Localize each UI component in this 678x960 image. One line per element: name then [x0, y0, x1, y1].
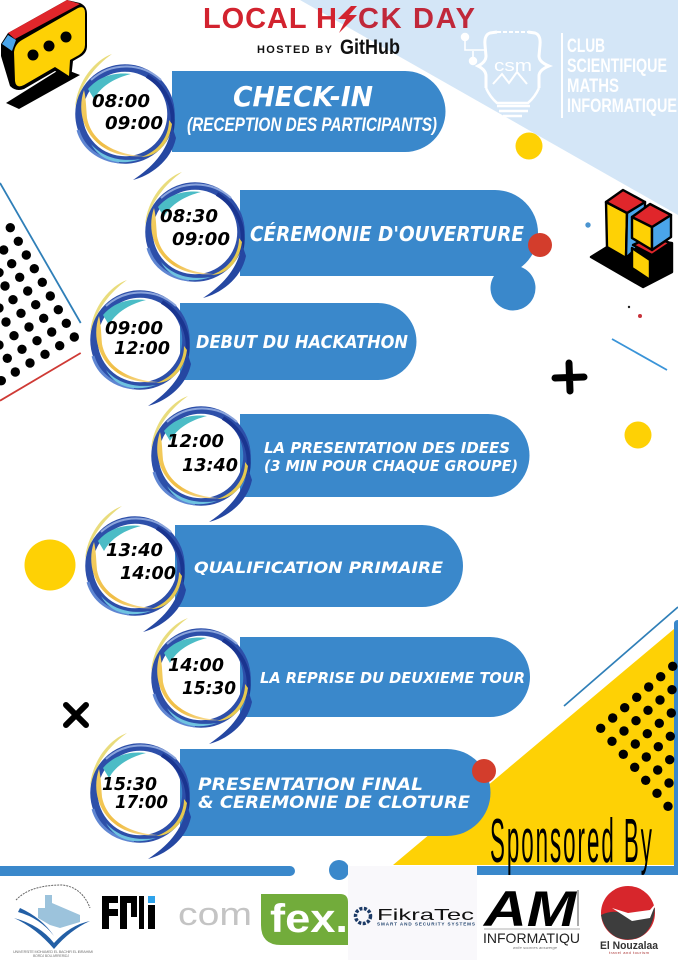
icon: plus [555, 363, 584, 391]
hosted by github [257, 36, 400, 59]
clock ring [90, 733, 191, 859]
times: 08:30 [160, 206, 218, 227]
times: 12:00 [114, 338, 170, 359]
clock ring [85, 506, 186, 632]
clock ring [151, 396, 252, 522]
logo: AM informatique [482, 881, 580, 950]
times [167, 431, 238, 476]
background: light blue corner [300, 0, 678, 215]
times: 15:30 [102, 774, 157, 795]
sponsored by heading: Sponsored By [490, 806, 652, 875]
dot pattern: left [0, 223, 79, 385]
background: yellow triangle [393, 629, 674, 865]
label: LA REPRISE DU DEUXIEME TOUR [260, 669, 525, 687]
logo: El Nouzalaa: travel and tourism [609, 950, 650, 955]
decorative line top of triangle [564, 607, 678, 706]
logo: El Nouzalaa: El Nouzalaa [600, 940, 659, 952]
label [264, 439, 518, 475]
logo: comfex: fex. [270, 897, 348, 941]
times: 13:40 [182, 455, 238, 476]
label: LA PRESENTATION DES IDEES [264, 439, 510, 457]
logo: fikratec: SMART AND SECURITY SYSTEMS [377, 922, 475, 926]
logo: comfex [178, 894, 348, 945]
schedule item 6 [151, 618, 530, 744]
label: PRESENTATION FINAL [198, 775, 423, 795]
logo: fikratec: FikraTec [377, 907, 474, 924]
clock ring [145, 172, 246, 298]
yellow dot right [624, 422, 652, 448]
times: 12:00 [167, 431, 224, 452]
logo: university: UNIVERSITE MOHAMED EL BACHIR EL IBRAHIMI [13, 950, 93, 954]
logo: AM informatique: write sources answerge [513, 945, 558, 950]
times [106, 540, 176, 584]
dot pattern: right [596, 662, 677, 811]
bar [240, 637, 530, 717]
logo: AM informatique: INFORMATIQU [483, 930, 580, 946]
left red line [0, 353, 81, 401]
bar [240, 190, 538, 276]
times: 15:30 [182, 678, 236, 699]
logo: FMI [102, 896, 155, 929]
schedule item 1 [75, 54, 446, 180]
red dot [472, 759, 496, 783]
club logo: bulb [462, 32, 549, 116]
icon: lightning bolt [338, 6, 357, 33]
title [203, 3, 475, 35]
logo: fikratec [356, 907, 475, 926]
clock ring [151, 618, 252, 744]
bar [180, 303, 416, 380]
small dots [585, 222, 642, 318]
label: (RECEPTION DES PARTICIPANTS) [187, 115, 437, 136]
label: QUALIFICATION PRIMAIRE [194, 558, 443, 577]
clock ring [90, 280, 191, 406]
red dot [528, 233, 552, 257]
title: LOCAL H [203, 3, 337, 35]
times [92, 91, 163, 134]
times [168, 655, 236, 699]
footer bar [0, 866, 295, 876]
bar bump [490, 266, 536, 310]
times: 14:00 [120, 563, 176, 584]
label [187, 80, 437, 136]
club name: CLUB [567, 36, 605, 57]
times: 08:00 [92, 91, 150, 112]
club divider [561, 33, 563, 118]
bar [180, 749, 490, 836]
yellow dot left [24, 540, 76, 590]
times: 09:00 [172, 229, 230, 250]
logo: El Nouzalaa [600, 886, 659, 955]
times: 17:00 [115, 792, 168, 813]
times: 09:00 [105, 113, 163, 134]
label: CHECK-IN [233, 80, 373, 113]
schedule item 5 [85, 506, 463, 632]
club name [567, 36, 677, 117]
right small blue line [612, 339, 667, 370]
left blue line [0, 183, 81, 323]
schedule item 4 [151, 396, 530, 522]
times: 09:00 [105, 318, 163, 339]
label: CÉREMONIE D'OUVERTURE [250, 222, 524, 246]
club logo: bulb: csm [494, 56, 532, 75]
times [160, 206, 230, 250]
label: (3 MIN POUR CHAQUE GROUPE) [264, 457, 518, 475]
fikratec panel [348, 866, 477, 960]
right blue strip [477, 620, 678, 875]
times [105, 318, 170, 359]
logo: university [13, 885, 93, 958]
label [198, 775, 470, 813]
hosted by github: HOSTED BY [257, 44, 333, 56]
logo: comfex: com [178, 896, 252, 932]
times: 14:00 [168, 655, 224, 676]
bar [175, 525, 463, 607]
label: & CEREMONIE DE CLOTURE [198, 793, 470, 813]
title: CK DAY [358, 3, 475, 35]
label: DEBUT DU HACKATHON [196, 332, 408, 353]
bar [240, 414, 530, 497]
footer dot [329, 860, 349, 880]
schedule item 7 [90, 733, 496, 859]
icon: speech bubble [1, 0, 87, 109]
logo: university: BORDJ BOU ARRERIDJ [33, 954, 69, 958]
times: 13:40 [106, 540, 163, 561]
hosted by github: GitHub [340, 36, 400, 59]
yellow dot top [516, 132, 542, 160]
icon: cross [66, 705, 86, 725]
schedule item 2 [145, 172, 552, 310]
icon: blocks [591, 190, 672, 287]
times [102, 774, 168, 813]
club name: MATHS [567, 76, 619, 97]
schedule item 3 [90, 280, 416, 406]
bar [172, 71, 446, 152]
logo: AM informatique: AM [482, 881, 578, 937]
clock ring [75, 54, 176, 180]
